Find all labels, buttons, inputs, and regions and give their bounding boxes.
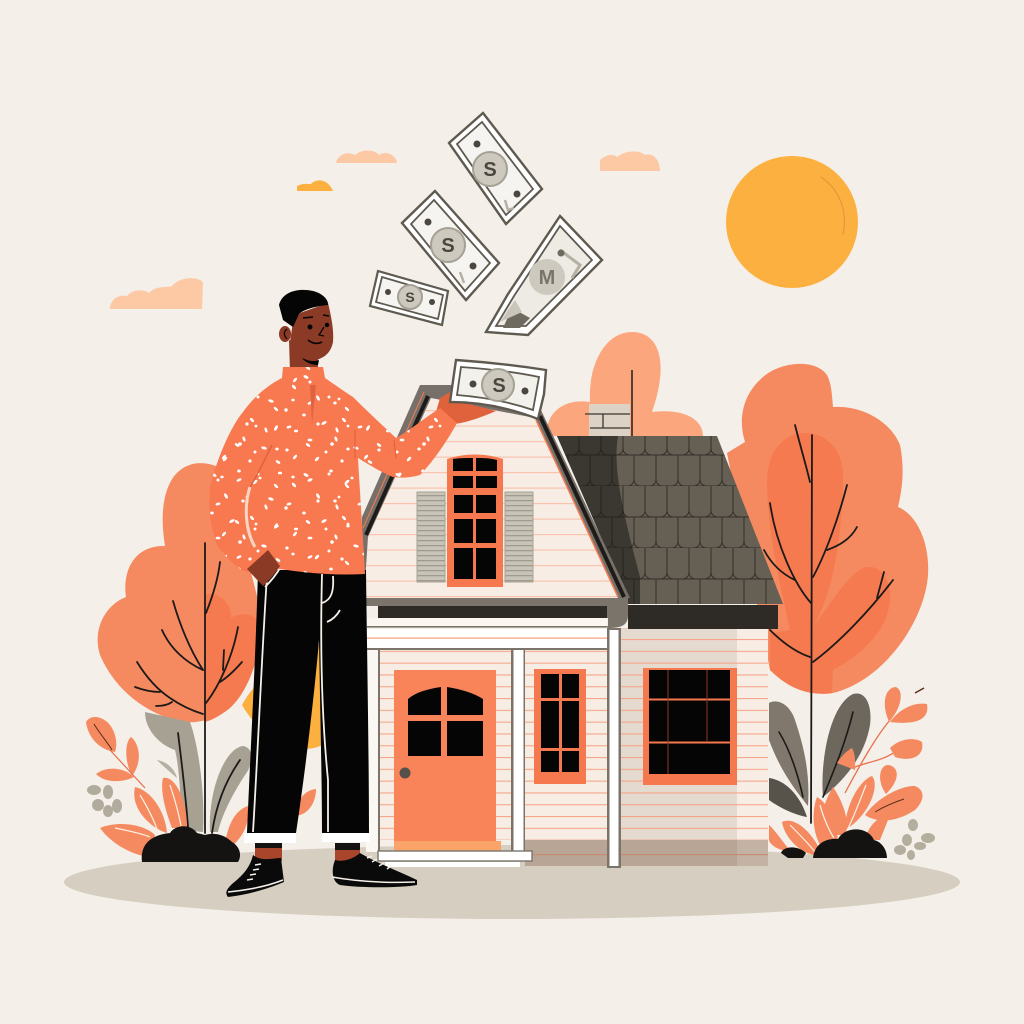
plants: right [769,687,935,860]
money: bill top [449,113,542,224]
porch wall [378,650,608,840]
sage sprig [87,785,122,817]
chimney [585,404,630,437]
roof shadow [557,436,640,604]
money: bill held in hand: S [492,375,506,397]
black mounds [813,829,887,858]
porch steps [378,851,532,867]
cloud: top left [336,150,397,163]
money: bill right: M [539,267,555,289]
tree: right [727,364,928,823]
neck [289,340,318,372]
columns [366,628,621,868]
upper window [447,454,503,587]
person [209,290,496,897]
sage sprig [894,819,935,860]
wall: right [620,628,768,842]
roof eave: right [628,605,778,629]
money: bill middle [402,191,499,300]
gray leaves [145,712,252,832]
money: bill middle: S [441,235,455,257]
yellow bush behind legs [242,645,322,749]
money: bill right [486,216,602,335]
plants: left [86,712,316,862]
pocket hand [247,550,280,586]
orange leaves [845,720,895,793]
upper shutters [417,492,533,582]
shirt [209,367,457,575]
ground [64,845,960,919]
gray leaves [769,693,870,817]
face [279,290,333,365]
cloud: left [110,278,203,309]
money: bill top: S [483,159,497,181]
gable [362,385,630,598]
shoes [226,853,417,897]
big window [643,668,737,785]
black mound [142,826,240,862]
small window [534,669,586,784]
money: bill held in hand [450,360,546,419]
cloud: top right [600,151,660,171]
main roof [557,436,783,604]
cloud: small yellow [297,180,333,191]
foundation [525,840,768,866]
pants [244,568,370,843]
ankles [255,843,360,861]
tree: behind house [547,332,703,436]
money: bill left [370,271,448,325]
money: bill left: S [405,289,415,305]
door [394,670,501,851]
arm hand resting [436,392,496,424]
orange leaves [86,717,316,857]
fascia and beams [363,598,628,650]
tree: left [98,463,260,833]
sun [726,156,858,288]
house [362,385,783,868]
